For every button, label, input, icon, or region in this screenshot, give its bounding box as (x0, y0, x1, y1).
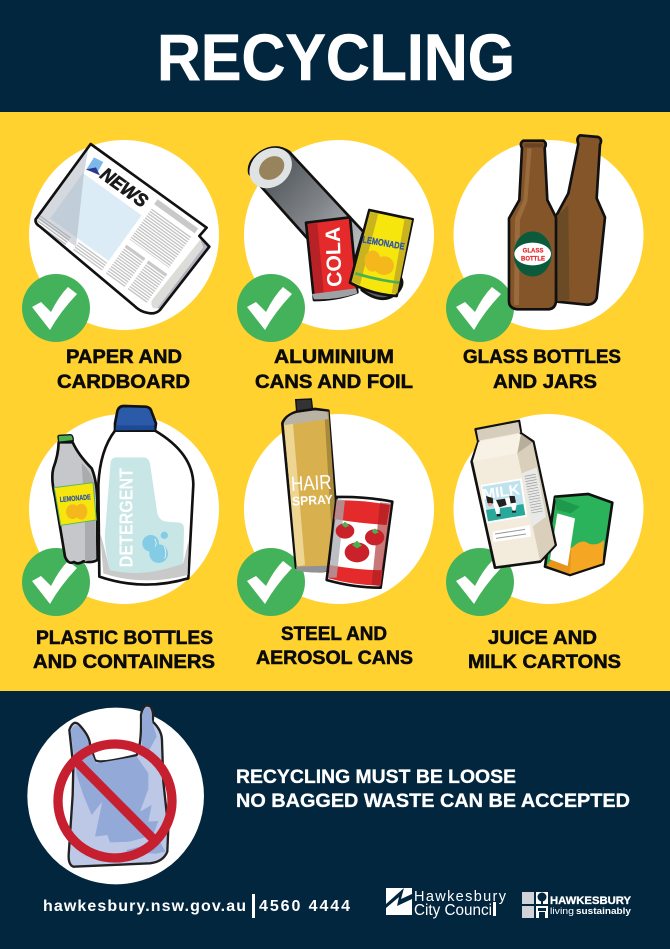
footer band (0, 691, 670, 949)
icon: plastic bottles (52, 406, 193, 585)
icon: lemonade bottle (52, 435, 97, 563)
icon: green tick (446, 274, 514, 342)
icon: aerosol and tin (282, 399, 392, 588)
label: JUICE AND (488, 627, 597, 649)
logo: Hawkesbury living sustainably: sustainably (576, 906, 632, 917)
panel: plastic bottles and containers (22, 406, 219, 673)
label: CARDBOARD (57, 371, 190, 393)
yellow panel background (0, 112, 670, 691)
logo: Hawkesbury City Council (386, 888, 507, 919)
logo: Hawkesbury living sustainably: living (550, 906, 574, 917)
icon: green tick (22, 548, 90, 616)
icon: glass bottles (509, 135, 605, 309)
icon: cartons (472, 421, 612, 575)
logo: Hawkesbury living sustainably (522, 892, 632, 918)
icon: green tick (22, 274, 90, 342)
icon: detergent bottle: DETERGENT (116, 467, 137, 567)
label: ALUMINIUM (274, 346, 394, 368)
icon: no plastic bags (27, 706, 204, 884)
icon: plastic bag (69, 706, 168, 867)
icon: newspaper (36, 144, 209, 313)
panel: aluminium cans and foil (237, 139, 434, 393)
icon: cow (486, 496, 517, 516)
icon: milk carton (472, 421, 556, 568)
label: AND CONTAINERS (33, 651, 215, 673)
icon: front bottle: BOTTLE (521, 255, 545, 262)
icon: newspaper: NEWS (97, 163, 153, 212)
label: PAPER AND (66, 346, 182, 368)
title: RECYCLING (157, 20, 515, 94)
label: PLASTIC BOTTLES (36, 627, 213, 649)
label (33, 627, 215, 673)
website and phone: 4560 4444 (259, 898, 350, 915)
icon: green tick (237, 548, 305, 616)
header band (0, 0, 670, 112)
label: CANS AND FOIL (255, 371, 413, 393)
icon: aerosol can: HAIR (290, 471, 332, 496)
icon: rear bottle (557, 135, 605, 305)
label (255, 346, 413, 393)
panel: paper and cardboard (22, 140, 219, 393)
icon: front bottle (509, 141, 569, 309)
panel: glass bottles and jars (446, 135, 644, 393)
icon: milk carton: MILK (482, 482, 521, 503)
icon: cola can (306, 217, 357, 300)
label: STEEL AND (281, 623, 387, 645)
icon: juice box (545, 494, 612, 575)
icon: lemonade bottle: LEMONADE (59, 492, 91, 504)
icon: detergent bottle (98, 406, 193, 585)
icon: prohibition sign (58, 744, 172, 858)
panel: juice and milk cartons (446, 414, 644, 673)
label: MILK CARTONS (468, 651, 621, 673)
icon: green tick (446, 548, 514, 616)
website and phone (43, 894, 350, 918)
icon: cola can: COLA (322, 226, 347, 287)
panel: steel and aerosol cans (237, 399, 434, 669)
warning text: RECYCLING MUST BE LOOSE (236, 767, 516, 788)
label (468, 627, 621, 673)
icon: green tick (237, 274, 305, 342)
logo: Hawkesbury City Council: Hawkesbury (414, 889, 507, 905)
icon: tomato tin (327, 497, 392, 588)
icon: lemonade can (350, 210, 413, 296)
label (463, 346, 621, 393)
label (256, 623, 413, 669)
website and phone: hawkesbury.nsw.gov.au (43, 898, 246, 915)
logo: Hawkesbury living sustainably: HAWKESBURY (550, 895, 632, 907)
label: GLASS BOTTLES (463, 346, 621, 368)
label: AEROSOL CANS (256, 647, 413, 669)
icon: foil roll and cans (241, 139, 413, 300)
logo: Hawkesbury City Council: City Counci (414, 902, 492, 919)
label (57, 346, 190, 393)
icon: aerosol can (282, 399, 338, 572)
warning text (236, 767, 630, 812)
icon: aerosol can: SPRAY (292, 493, 334, 509)
icon: front bottle: GLASS (523, 248, 544, 255)
warning text: NO BAGGED WASTE CAN BE ACCEPTED (236, 791, 630, 812)
icon: lemonade can: LEMONADE (362, 234, 405, 252)
label: AND JARS (493, 371, 597, 393)
